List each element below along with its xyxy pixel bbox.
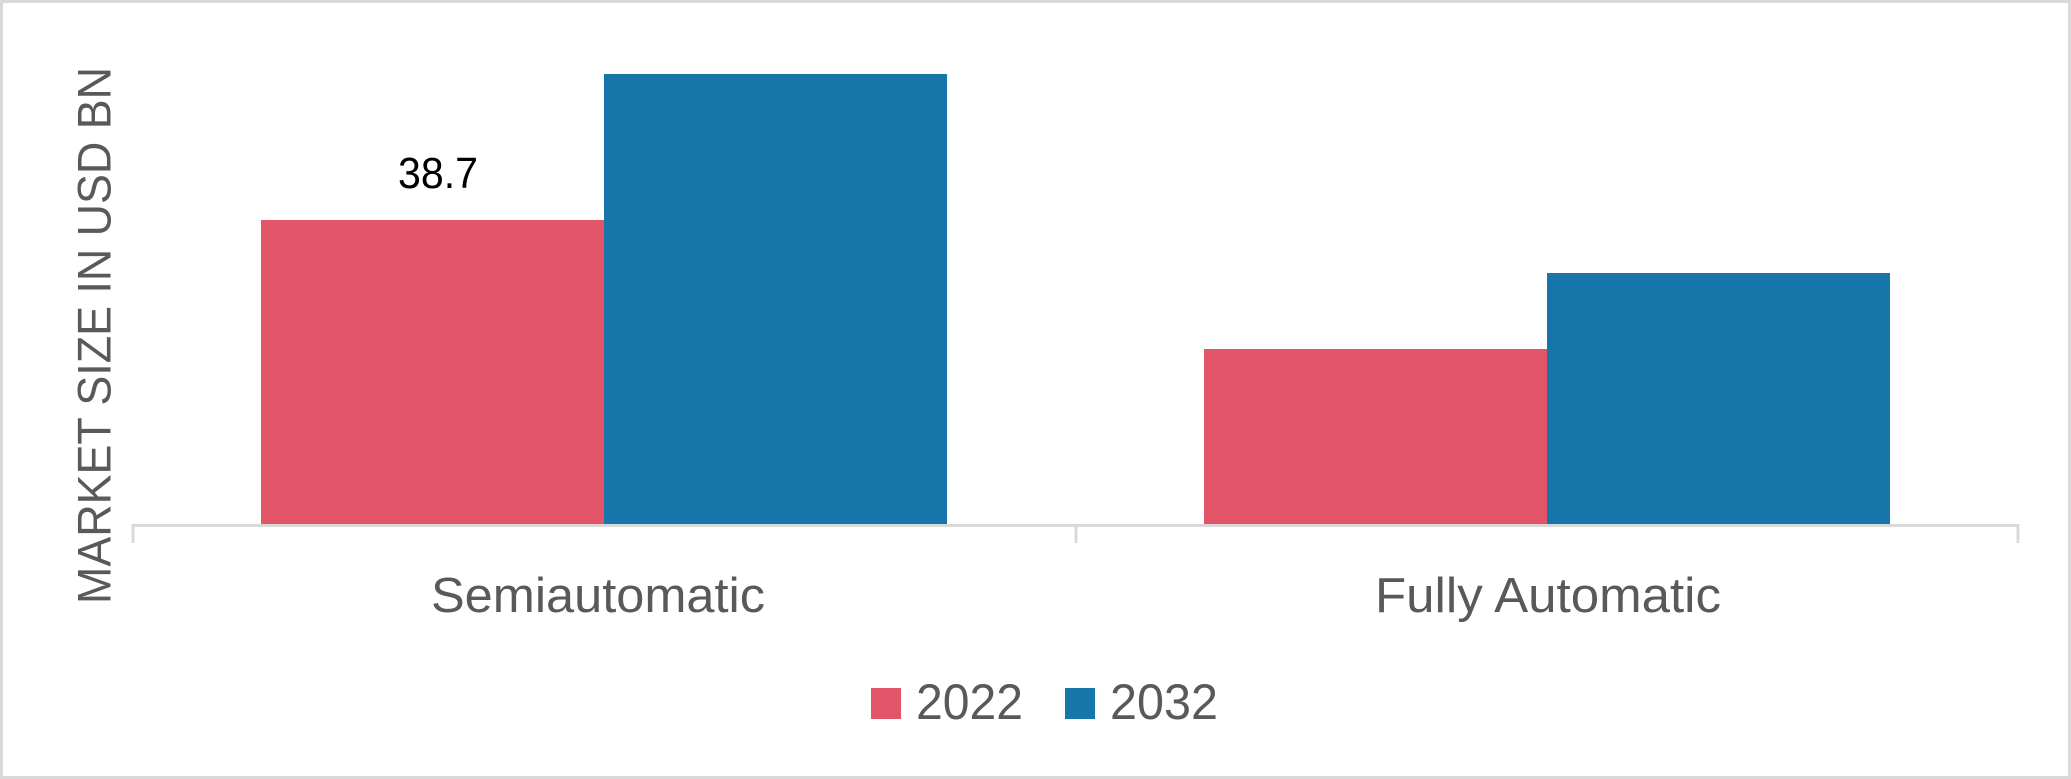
legend swatch: 2032 (1065, 688, 1095, 719)
x axis with ticks (132, 524, 2018, 543)
category label: Semiautomatic: Semiautomatic (431, 569, 765, 623)
legend label: 2032: 2032 (1110, 674, 1218, 730)
y-axis title: MARKET SIZE IN USD BN (68, 67, 120, 604)
bars: Semiautomatic (261, 74, 947, 524)
data label: 38.7: 38.7 (398, 149, 478, 198)
bar: Fully Automatic 2032 (1547, 273, 1890, 524)
category label: Fully Automatic: Fully Automatic (1375, 569, 1721, 623)
legend (871, 674, 1218, 730)
bar: Fully Automatic 2022 (1204, 349, 1547, 524)
legend label: 2022: 2022 (916, 674, 1023, 730)
bars: Fully Automatic (1204, 273, 1890, 524)
bar: Semiautomatic 2032 (604, 74, 947, 524)
bar: Semiautomatic 2022 (261, 220, 604, 524)
legend swatch: 2022 (871, 688, 901, 719)
